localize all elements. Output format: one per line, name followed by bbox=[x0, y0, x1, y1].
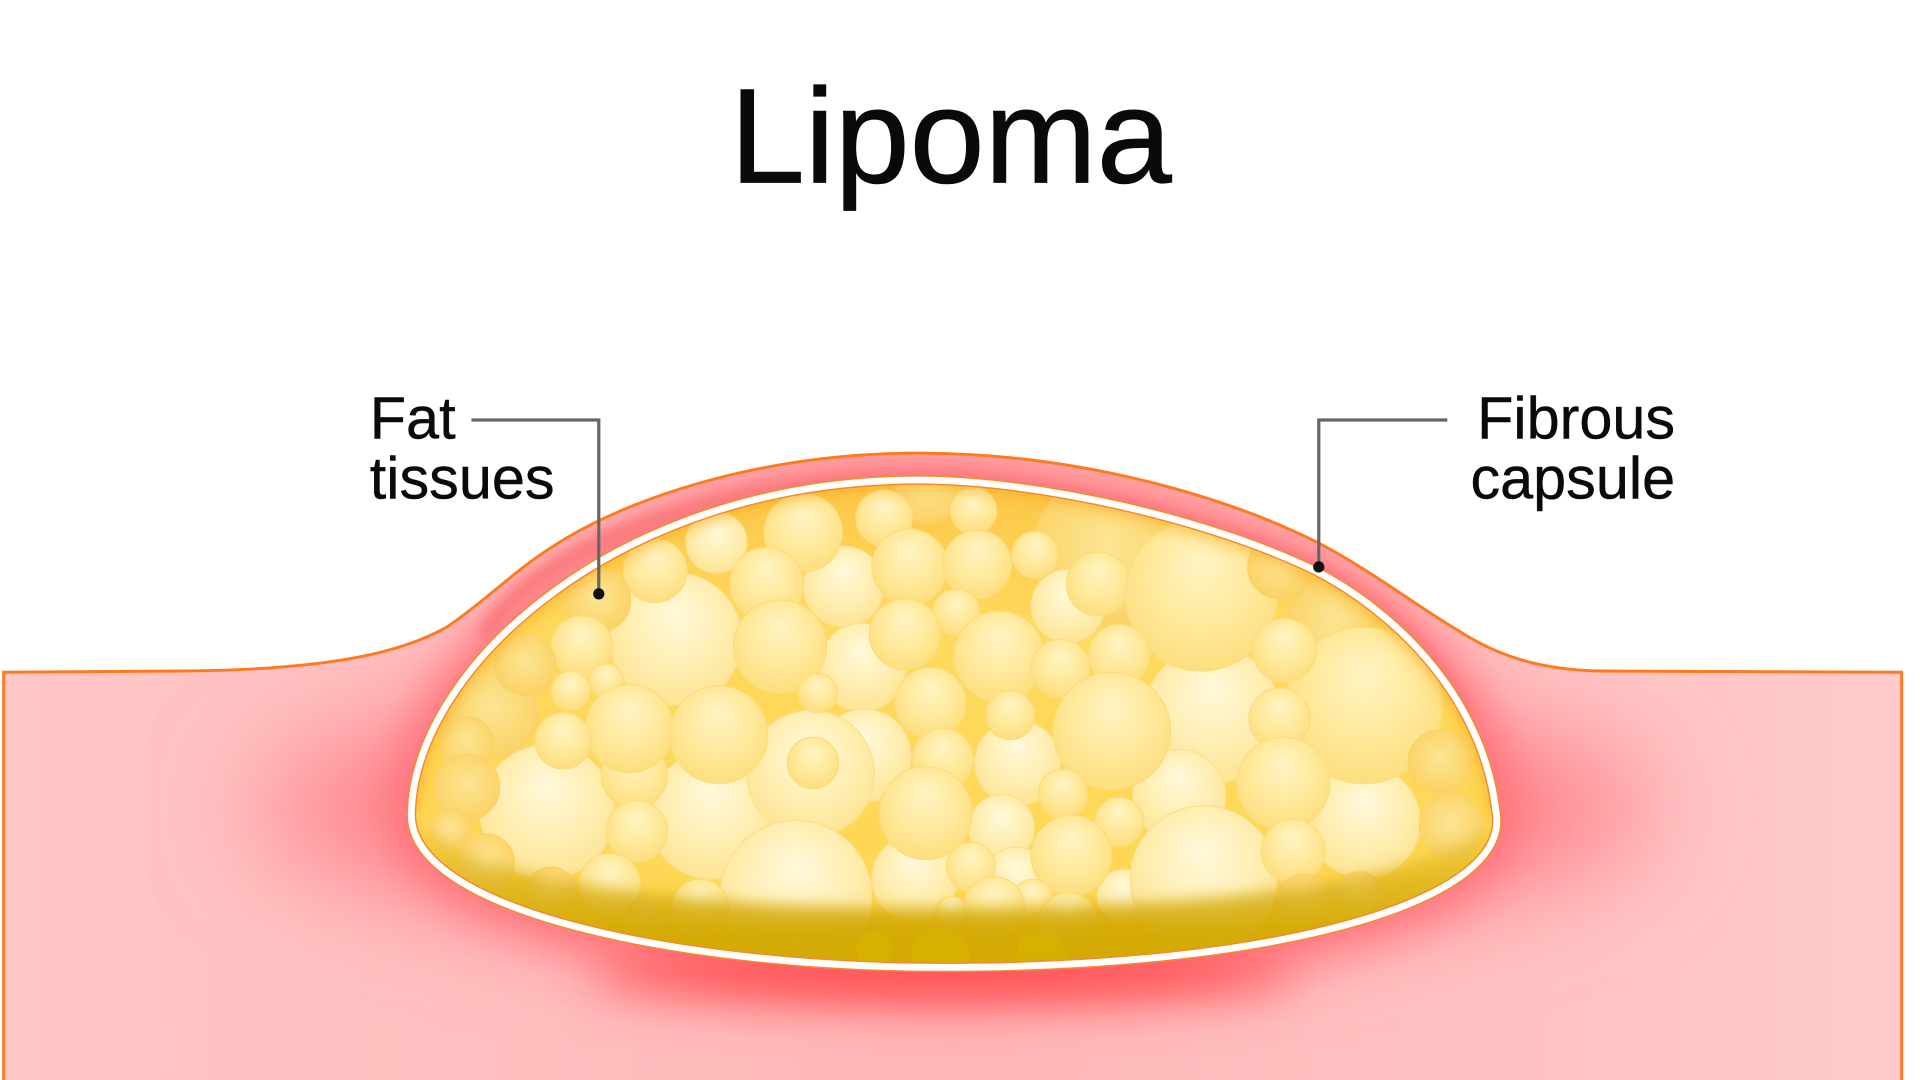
fat cells bbox=[430, 484, 1484, 930]
lipoma fat mass bbox=[411, 457, 1497, 987]
callout: fibrous capsule bbox=[1313, 384, 1675, 573]
callout: fibrous capsule: capsule bbox=[1470, 444, 1675, 511]
title: Lipoma bbox=[730, 60, 1172, 211]
callout: fat tissues: tissues bbox=[370, 444, 555, 511]
callout: fat tissues bbox=[370, 384, 604, 600]
skin tissue bbox=[4, 453, 1902, 1080]
callout: fat tissues: Fat bbox=[370, 384, 456, 451]
callout: fibrous capsule: Fibrous bbox=[1477, 384, 1675, 451]
fat mass shading bbox=[411, 480, 1497, 987]
